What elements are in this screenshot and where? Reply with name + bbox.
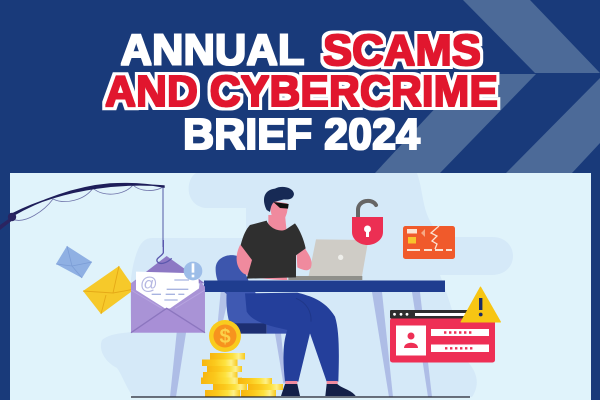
icon: purple phishing envelope: [131, 240, 205, 333]
title: SCAMS: [323, 26, 481, 75]
title: [105, 26, 498, 159]
title: AND CYBERCRIME: [105, 67, 498, 116]
table legs: [170, 292, 432, 397]
icon: cracked credit card: [403, 226, 455, 259]
table top: [204, 280, 445, 292]
trousers: [245, 293, 339, 382]
shoes: [281, 384, 356, 396]
icon: dollar coin: $: [219, 326, 231, 348]
icon: small blue envelope: [56, 246, 92, 278]
icon: warning triangle: [461, 287, 500, 322]
laptop: [288, 239, 368, 280]
title: BRIEF 2024: [183, 110, 421, 159]
icon: fishing rod and line: [0, 184, 164, 247]
figure: hacker at chair: [216, 239, 368, 396]
browser login window: [390, 310, 495, 362]
chevron decoration: [375, 0, 600, 173]
background blob: [101, 173, 513, 397]
icon: purple phishing envelope: @: [140, 273, 158, 293]
icon: yellow envelope: [83, 266, 135, 314]
illustration panel: [10, 173, 591, 400]
chair: [216, 255, 320, 383]
title: ANNUAL: [120, 26, 304, 74]
icon: dollar coin: [209, 320, 241, 352]
icon: open padlock: [352, 201, 383, 245]
torso and head: [237, 187, 312, 280]
coin stacks: [201, 353, 283, 396]
ground line: [131, 396, 470, 398]
